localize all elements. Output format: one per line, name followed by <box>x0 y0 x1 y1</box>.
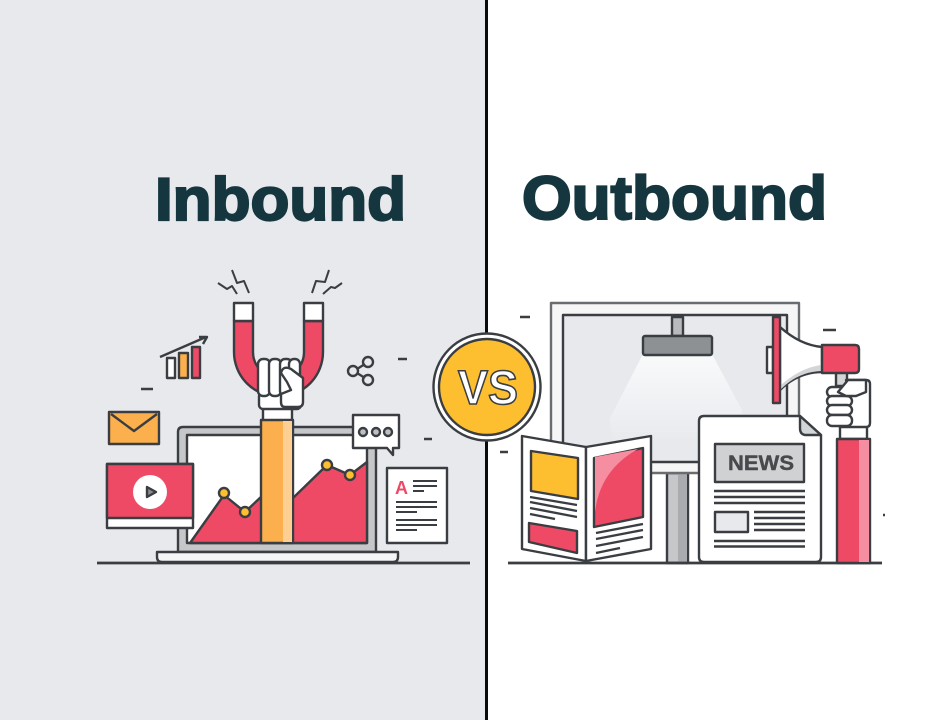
laptop <box>157 427 398 562</box>
illustration: inbound <box>97 270 470 563</box>
illustration: outbound <box>500 303 885 563</box>
projector light <box>610 356 742 440</box>
ground line <box>508 562 882 564</box>
icon: magnet <box>234 303 323 396</box>
icon: video player <box>107 464 193 528</box>
icon: fist <box>258 359 303 421</box>
title: Inbound: Inbound <box>155 166 406 233</box>
panel: outbound background <box>488 0 950 720</box>
arm <box>837 439 870 563</box>
icon: chat bubble <box>353 415 399 455</box>
brochure <box>522 436 651 561</box>
badge: VS: VS <box>458 362 518 415</box>
lamp <box>672 317 683 336</box>
billboard <box>551 303 799 563</box>
newspaper <box>699 416 821 562</box>
center divider <box>485 0 488 720</box>
title: Outbound: Outbound <box>522 164 827 232</box>
icon: share <box>348 357 373 385</box>
badge: VS <box>434 334 540 440</box>
letter A: A <box>395 478 408 498</box>
icon: hand holding megaphone <box>827 380 870 439</box>
ground line <box>97 562 470 564</box>
icon: envelope <box>109 412 159 444</box>
icon: megaphone <box>767 317 859 403</box>
icon: sparks <box>218 270 342 294</box>
news header <box>715 444 804 482</box>
area chart <box>190 460 367 543</box>
icon: growth bars <box>160 337 207 378</box>
panel: inbound background <box>0 0 485 720</box>
dash marks <box>141 359 432 439</box>
arm <box>261 420 293 543</box>
dash marks <box>500 317 885 515</box>
headline text: NEWS <box>728 452 794 475</box>
icon: document <box>387 468 447 543</box>
